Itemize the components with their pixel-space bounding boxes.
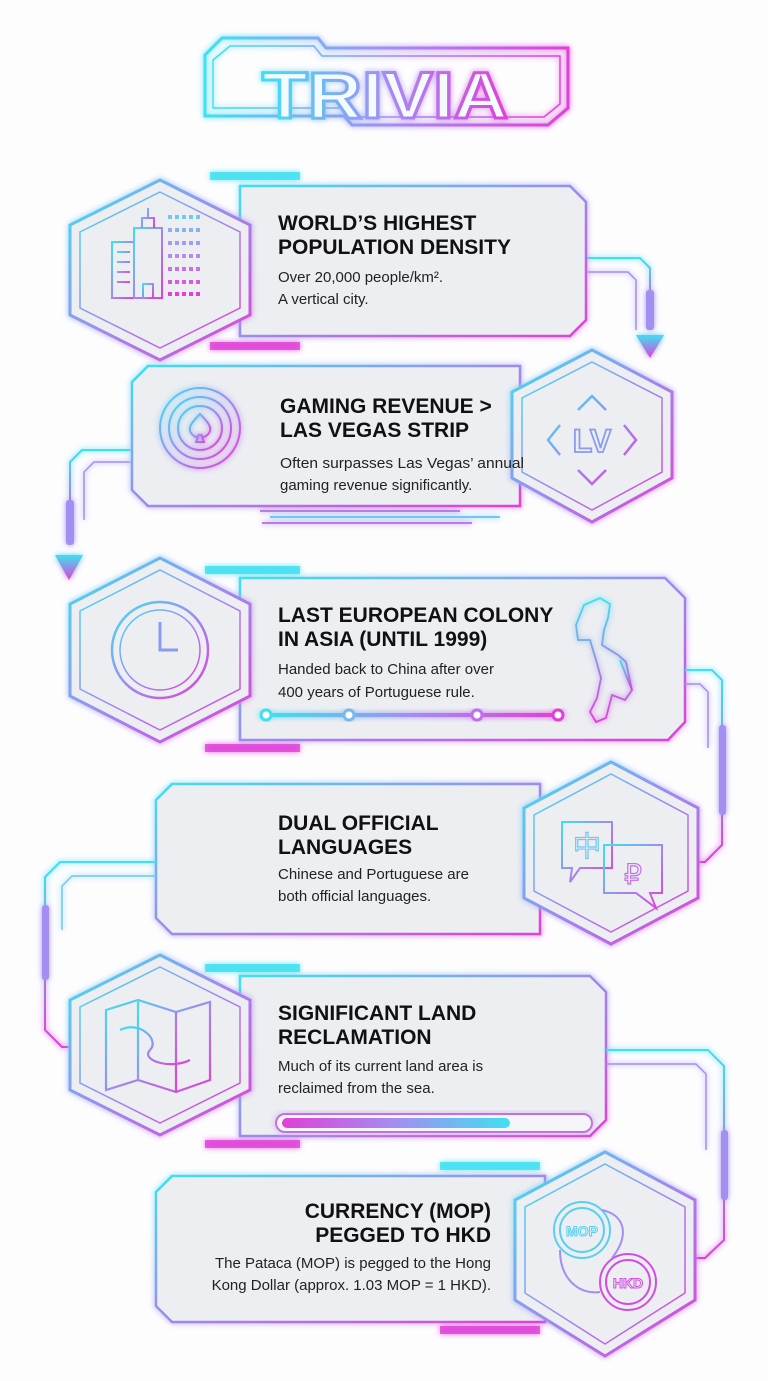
text: gaming revenue: GAMING REVENUE > <box>280 395 492 418</box>
text: currency: CURRENCY (MOP) <box>305 1200 491 1223</box>
text: land reclamation: SIGNIFICANT LAND <box>278 1002 476 1025</box>
text: currency: The Pataca (MOP) is pegged to the Hong <box>215 1255 491 1272</box>
card 6 <box>156 1152 695 1356</box>
hexagon: clock icon <box>70 558 250 742</box>
text: dual languages: Chinese and Portuguese are <box>278 866 469 883</box>
text: european colony: 400 years of Portuguese rule. <box>278 684 475 701</box>
hexagon: language icon: 中 <box>573 831 601 862</box>
text: dual languages: both official languages. <box>278 888 431 905</box>
text: european colony: LAST EUROPEAN COLONY <box>278 604 553 627</box>
title: TRIVIA <box>262 58 508 132</box>
text: population density <box>278 212 511 308</box>
panel: dual languages <box>156 784 540 934</box>
hexagon: map icon <box>70 955 250 1135</box>
hexagon: LV icon <box>512 350 672 522</box>
text: currency: Kong Dollar (approx. 1.03 MOP = 1 HKD). <box>212 1277 491 1294</box>
icon: casino chip <box>160 388 240 468</box>
icon: Macau map <box>576 598 632 722</box>
text: land reclamation: RECLAMATION <box>278 1026 432 1049</box>
text: land reclamation <box>278 1002 483 1097</box>
text: european colony <box>278 604 553 701</box>
text: european colony: Handed back to China after over <box>278 661 494 678</box>
text: european colony: IN ASIA (UNTIL 1999) <box>278 628 487 651</box>
card 2 <box>132 350 672 524</box>
text: gaming revenue: LAS VEGAS STRIP <box>280 419 469 442</box>
text: dual languages: DUAL OFFICIAL <box>278 812 439 835</box>
text: land reclamation: reclaimed from the sea. <box>278 1080 435 1097</box>
hexagon: currency chain icon <box>515 1152 695 1356</box>
title <box>205 38 568 132</box>
hexagon: currency chain icon: HKD <box>613 1275 643 1291</box>
panel: currency <box>156 1162 545 1334</box>
connector: card2 to card3 arrow <box>55 450 132 580</box>
text: population density: Over 20,000 people/km². <box>278 269 443 286</box>
panel: land reclamation <box>205 964 606 1148</box>
panel: gaming revenue <box>132 366 520 524</box>
text: population density: WORLD’S HIGHEST <box>278 212 477 235</box>
timeline <box>261 710 563 720</box>
hexagon: currency chain icon: MOP <box>566 1223 598 1239</box>
text: gaming revenue: gaming revenue significantly. <box>280 477 472 494</box>
text: population density: A vertical city. <box>278 291 369 308</box>
text: dual languages <box>278 812 469 905</box>
text: gaming revenue <box>280 395 524 494</box>
hexagon: building icon <box>70 180 250 360</box>
text: currency: PEGGED TO HKD <box>315 1224 491 1247</box>
text: population density: POPULATION DENSITY <box>278 236 511 259</box>
text: currency <box>212 1200 491 1294</box>
card 3 <box>70 558 685 752</box>
panel: european colony <box>205 566 685 752</box>
hexagon: LV icon: LV <box>573 423 612 459</box>
connector: card5 to card6 <box>606 1050 728 1258</box>
panel: population density <box>210 172 586 350</box>
text: gaming revenue: Often surpasses Las Vegas’ annual <box>280 455 524 472</box>
card 5 <box>70 955 606 1148</box>
connector: card1 to card2 arrow <box>585 258 664 358</box>
connector: card4 to card5 <box>42 862 156 1047</box>
text: dual languages: LANGUAGES <box>278 836 412 859</box>
connector: card3 to card4 <box>685 670 726 862</box>
card 1 <box>70 172 586 360</box>
hexagon: language icon <box>524 762 698 944</box>
text: land reclamation: Much of its current land area is <box>278 1058 483 1075</box>
card 4 <box>156 762 698 944</box>
progress bar <box>276 1114 592 1132</box>
hexagon: language icon: ₽ <box>624 859 642 890</box>
